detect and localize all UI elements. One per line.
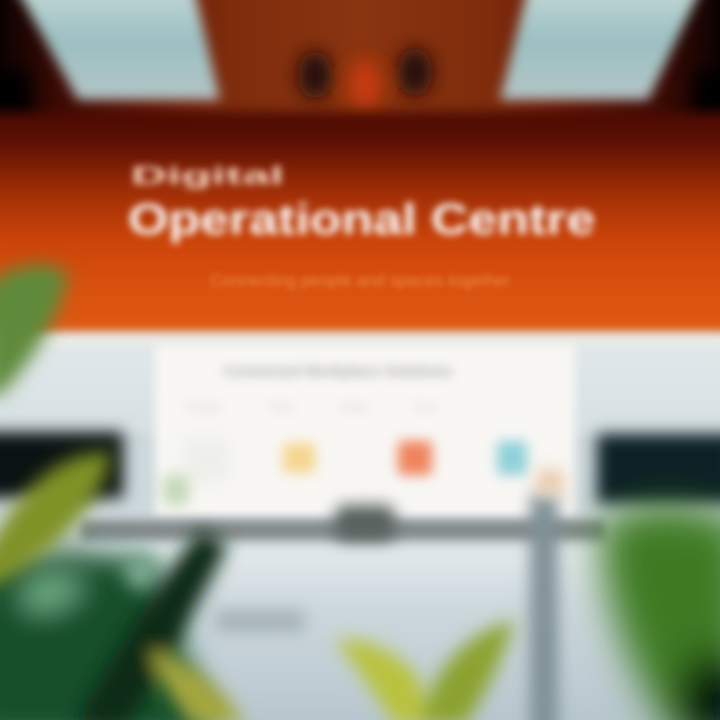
post — [530, 495, 558, 720]
post cap — [537, 470, 563, 494]
railing joint — [335, 505, 395, 541]
panel: wall — [0, 334, 720, 434]
panel: floor — [0, 545, 720, 720]
floor shadow text — [215, 610, 305, 632]
panel: right dark window — [597, 434, 720, 504]
icon: small green mark — [163, 475, 189, 505]
title: Digital — [131, 162, 284, 190]
panel: left dark window — [0, 432, 123, 498]
icon: pale — [183, 437, 229, 483]
column labels: Design Plan Build Run — [185, 400, 437, 414]
heading: Connected Workplace Solutions — [223, 363, 453, 380]
panel: white screen — [155, 345, 575, 517]
icon: cyan square — [497, 441, 527, 475]
icon: yellow square — [283, 443, 315, 473]
panel: ceiling — [0, 0, 720, 150]
plant: right — [598, 506, 720, 720]
railing — [80, 520, 605, 540]
plant: lower left — [0, 550, 210, 720]
icon: orange square — [398, 441, 432, 475]
plant: upper left — [0, 264, 68, 395]
panel: orange title banner — [0, 112, 720, 334]
subtitle: Connecting people and spaces together — [210, 271, 511, 290]
title — [124, 160, 600, 249]
plant: bottom center — [335, 620, 515, 720]
title: Operational Centre — [128, 195, 595, 244]
